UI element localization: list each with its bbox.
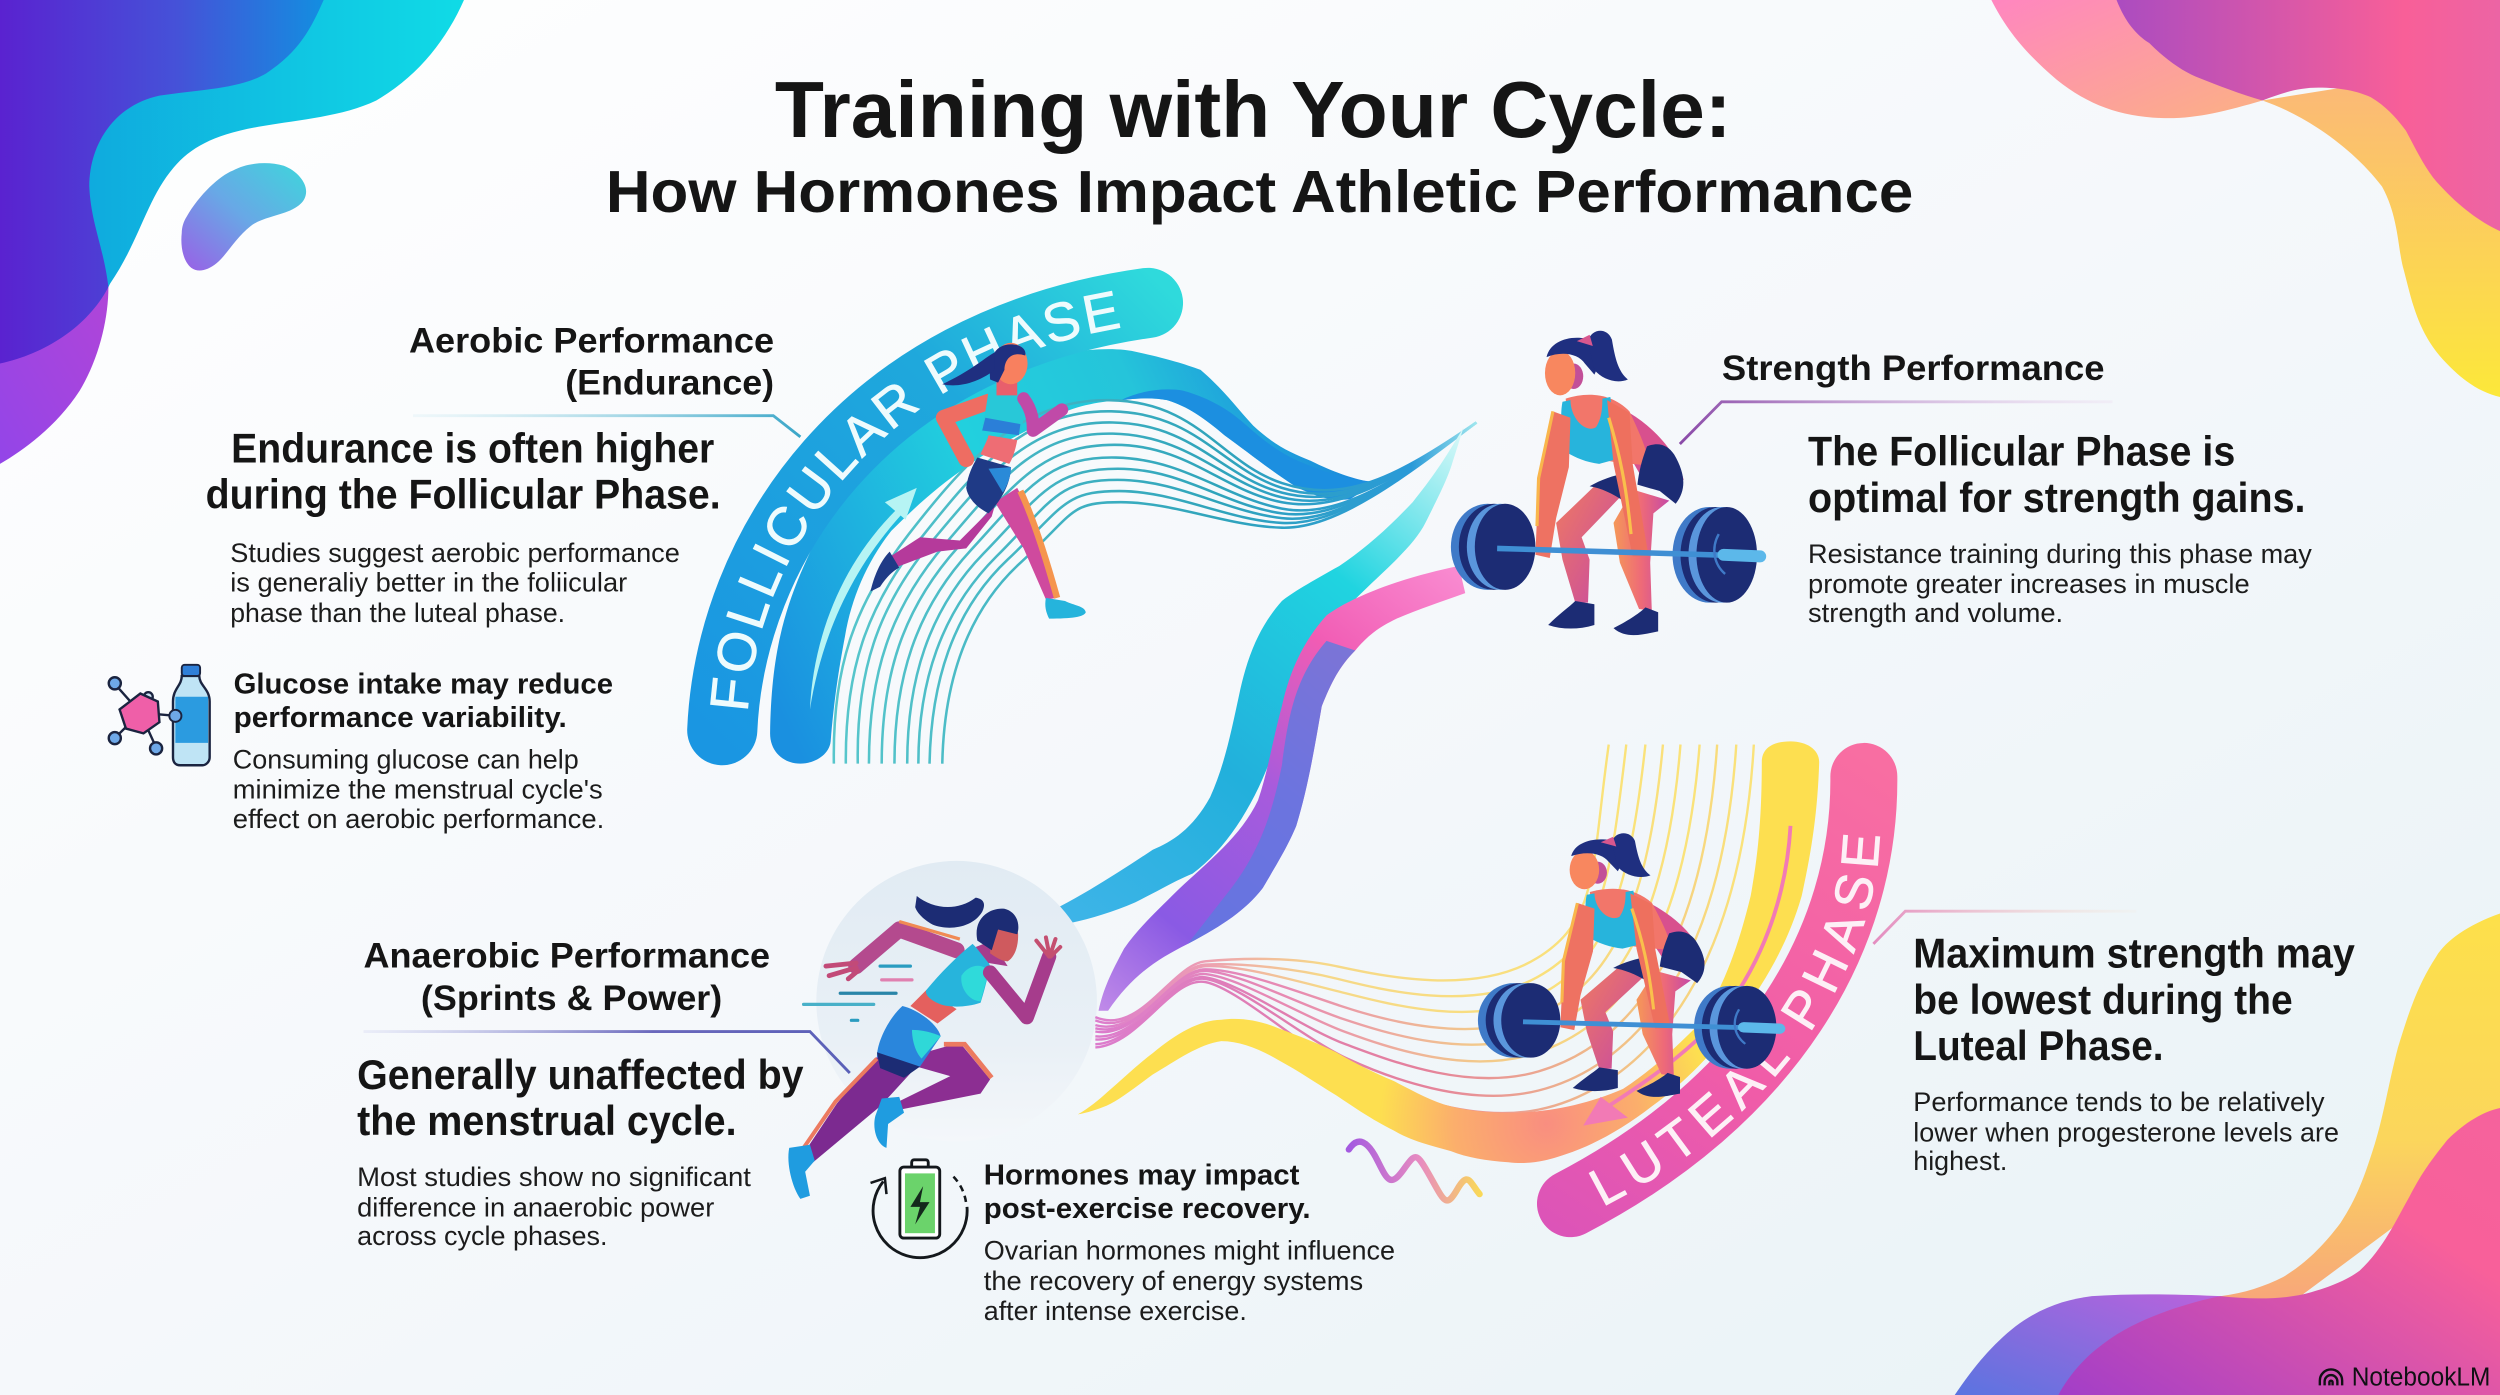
text: aerobic performance label: Aerobic Performance [409, 321, 774, 360]
text block: maximum strength: highest. [1913, 1145, 2007, 1176]
text block: endurance: is generaliy better in the foliicular [230, 566, 627, 597]
connector: anaerobic label [364, 1032, 850, 1073]
text block: anaerobic: across cycle phases. [357, 1220, 607, 1251]
text block: maximum strength: be lowest during the [1913, 976, 2293, 1023]
luteal fine lines [1095, 745, 1754, 1113]
text block: endurance: phase than the luteal phase. [230, 597, 565, 628]
ribbon: cyan wave to sprinter [1059, 427, 1464, 923]
text block: recovery: Hormones may impact [984, 1160, 1300, 1192]
decorative bean shape [181, 163, 306, 271]
text block: strength: strength and volume. [1808, 597, 2063, 628]
squiggle accent [1349, 1142, 1480, 1200]
text block: recovery: after intense exercise. [984, 1295, 1247, 1326]
text: aerobic performance label [409, 321, 774, 403]
title: Training with Your Cycle: [775, 65, 1732, 154]
text block: anaerobic: difference in anaerobic power [357, 1191, 714, 1222]
text block: recovery: post-exercise recovery. [984, 1193, 1311, 1225]
arrow: upward on follicular ribbon [810, 488, 917, 709]
runner figure [871, 343, 1086, 619]
text: anaerobic performance label: (Sprints & Power) [421, 979, 722, 1018]
text block: glucose: Consuming glucose can help [233, 743, 579, 774]
text: anaerobic performance label [364, 937, 770, 1018]
text block: anaerobic [357, 1051, 804, 1251]
text block: anaerobic: Most studies show no significant [357, 1161, 751, 1192]
icon: battery recovery [871, 1160, 967, 1258]
text block: endurance: Endurance is often higher [231, 424, 714, 471]
text block: endurance: during the Follicular Phase. [206, 471, 721, 518]
follicular phase band: FOLLICULAR PHASE [710, 290, 1120, 709]
title: How Hormones Impact Athletic Performance [606, 159, 1913, 225]
text block: strength: optimal for strength gains. [1808, 474, 2305, 521]
sprinter figure [788, 896, 1060, 1199]
text block: strength: The Follicular Phase is [1808, 428, 2235, 475]
follicular inner ribbon [770, 349, 1373, 764]
arrow: downward on luteal ribbon [1583, 826, 1790, 1126]
luteal phase band [1537, 742, 1898, 1238]
text block: strength: promote greater increases in muscle [1808, 568, 2250, 599]
text block: glucose: Glucose intake may reduce [234, 669, 613, 701]
text block: glucose: performance variability. [234, 702, 567, 734]
title [606, 65, 1913, 225]
text block: maximum strength: Performance tends to be relatively [1913, 1086, 2325, 1117]
text block: anaerobic: the menstrual cycle. [357, 1097, 737, 1144]
connector: aerobic label [413, 416, 800, 437]
follicular fine lines [834, 400, 1476, 764]
corner blob: top right [1991, 0, 2500, 397]
text block: maximum strength: lower when progesterone levels are [1913, 1117, 2339, 1148]
text block: maximum strength: Luteal Phase. [1913, 1022, 2164, 1069]
text: aerobic performance label: (Endurance) [565, 364, 774, 403]
lifter figure: strength [1451, 331, 1765, 635]
connector: luteal callout [1873, 911, 2136, 944]
text block: recovery: Ovarian hormones might influence [984, 1234, 1395, 1265]
text block: anaerobic: Generally unaffected by [357, 1051, 804, 1098]
text block: glucose: minimize the menstrual cycle's [233, 774, 603, 805]
text block: endurance: Studies suggest aerobic performance [230, 537, 680, 568]
text block: recovery: the recovery of energy systems [984, 1265, 1363, 1296]
lifter figure: luteal [1478, 833, 1784, 1097]
text block: glucose [233, 669, 613, 834]
corner blob: top left [0, 0, 464, 464]
corner blob: bottom right [1955, 914, 2500, 1395]
connector: strength label [1680, 402, 2113, 444]
disc behind sprinter [816, 861, 1097, 1142]
icon: molecule and water bottle [109, 665, 210, 765]
text block: strength: Resistance training during this phase may [1808, 538, 2312, 569]
text block: maximum strength [1913, 930, 2355, 1176]
ribbon: yellow luteal swoosh [1078, 741, 1819, 1163]
logo: NotebookLM: NotebookLM [2352, 1363, 2490, 1391]
text block: maximum strength: Maximum strength may [1913, 930, 2355, 977]
text block: recovery [984, 1160, 1395, 1326]
text block: glucose: effect on aerobic performance. [233, 803, 604, 834]
text block: endurance [206, 424, 721, 628]
text: strength performance label: Strength Performance [1722, 349, 2105, 388]
luteal phase band: LUTEAL PHASE [1588, 834, 1880, 1206]
text: anaerobic performance label: Anaerobic Performance [364, 937, 770, 976]
ribbon: pink purple to lifter [1099, 566, 1465, 1011]
text block: strength [1808, 428, 2312, 628]
